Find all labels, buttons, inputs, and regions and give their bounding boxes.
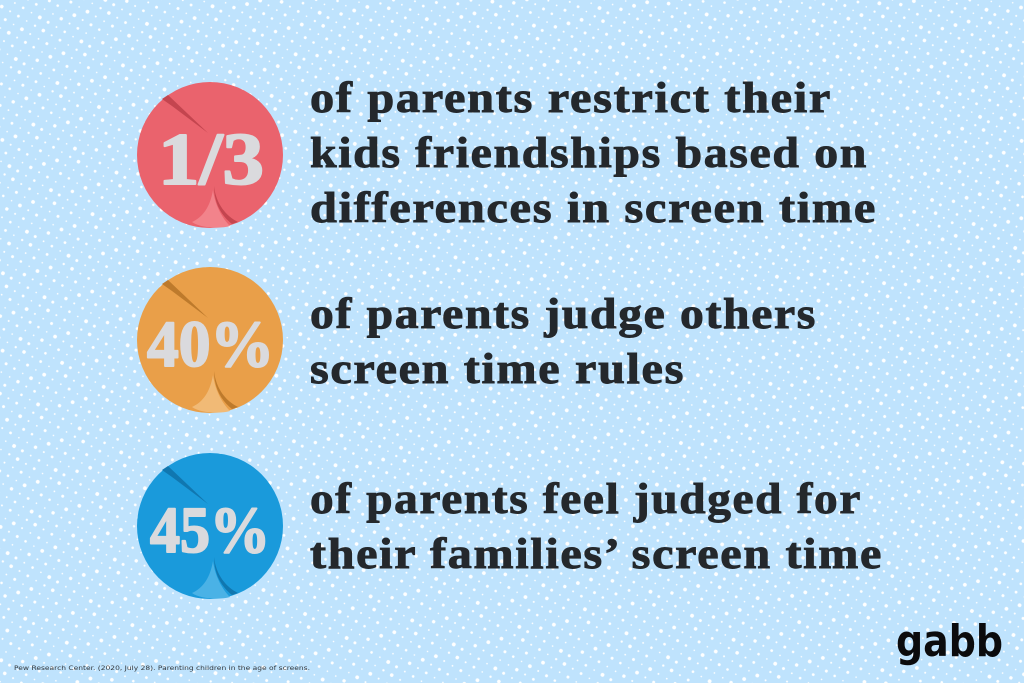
logo: gabb: gabb — [896, 616, 1003, 667]
text: stat 1 description — [310, 75, 877, 232]
badge: 40% orange sticker: 40% — [147, 308, 274, 381]
text: stat 1 description: differences in screen time — [310, 185, 877, 232]
text: stat 2 description — [310, 291, 817, 393]
text: stat 3 description: of parents feel judged for — [310, 476, 862, 523]
stat row 3 — [137, 453, 883, 599]
text: stat 3 description: their families’ screen time — [310, 531, 883, 578]
badge: 45% blue sticker — [137, 453, 283, 599]
badge: 1/3 red sticker: 1/3 — [158, 119, 264, 201]
text: stat 2 description: of parents judge others — [310, 291, 817, 338]
text: stat 2 description: screen time rules — [310, 346, 685, 393]
badge: 1/3 red sticker — [137, 82, 283, 228]
badge: 40% orange sticker — [137, 267, 283, 413]
text: stat 1 description: of parents restrict their — [310, 75, 832, 122]
badge: 45% blue sticker: 45% — [150, 494, 270, 567]
stat row 2 — [137, 267, 817, 413]
stat row 1 — [137, 75, 877, 232]
text: stat 1 description: kids friendships based on — [310, 130, 868, 177]
source citation: Pew Research Center. (2020, July 28). Parenting children in the age of screens. — [14, 664, 310, 672]
text: stat 3 description — [310, 476, 883, 578]
